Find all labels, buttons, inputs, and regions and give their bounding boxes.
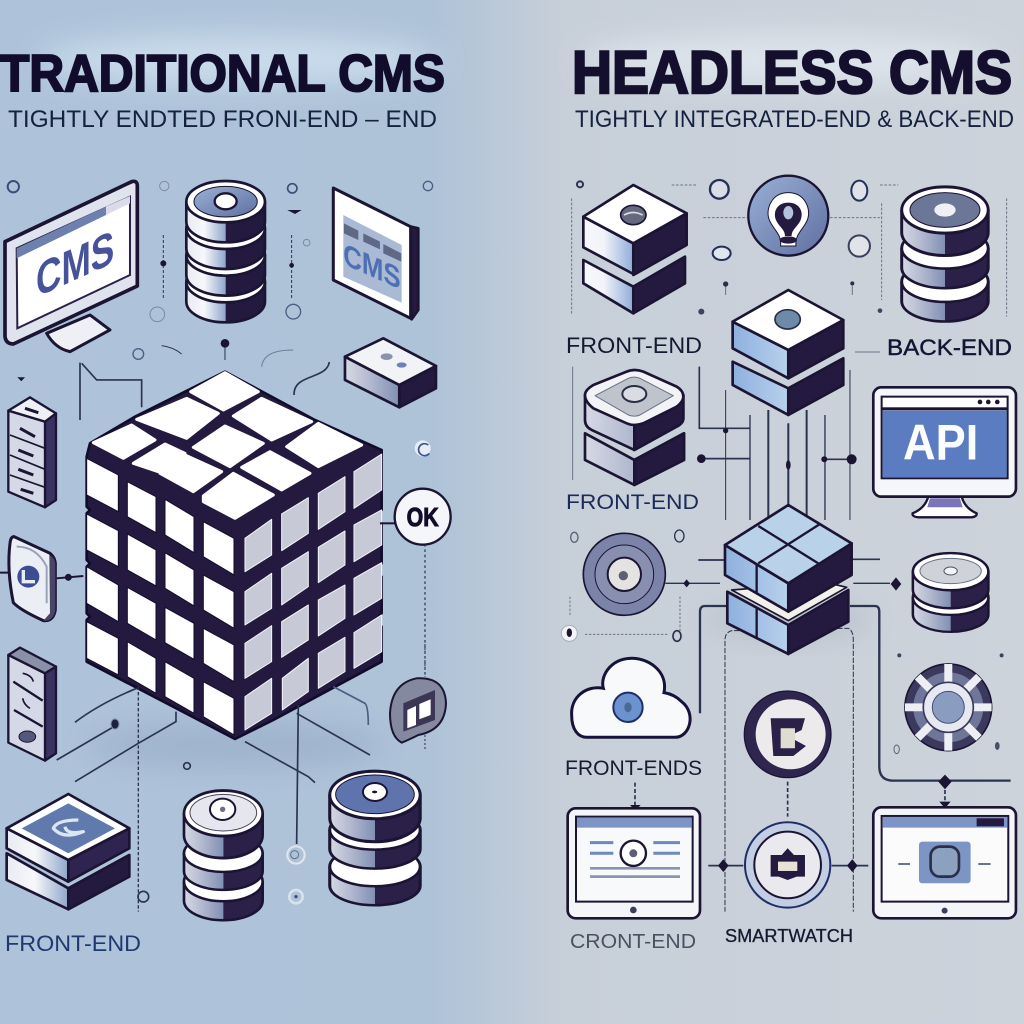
icon: refresh dot: [415, 440, 431, 456]
icon: round device: [0, 537, 83, 621]
label: API: API: [903, 414, 978, 470]
icon: circular C badge: [744, 691, 831, 778]
label: front-end bottom left: FRONT-END: [5, 931, 141, 956]
icon: stacked flat pad: [7, 794, 129, 909]
icon: filing cabinet lower: [8, 648, 56, 761]
icon: API monitor: [873, 387, 1016, 517]
icon: front-end block A: [583, 185, 687, 313]
icon: database stack top: [186, 181, 265, 322]
label: smartwatch: SMARTWATCH: [725, 926, 853, 946]
panel: headless CMS: [561, 39, 1016, 953]
icon: cloud: [572, 658, 690, 737]
label: CMS on monitor: CMS: [36, 220, 114, 308]
label: OK: OK: [407, 502, 439, 532]
icon: blue disc stack: [330, 771, 420, 905]
icon: target disc: [583, 533, 665, 615]
icon: central block: [733, 290, 843, 415]
panel: traditional CMS: [0, 45, 451, 956]
connector lines: traditional bottom: [57, 640, 425, 912]
label: back-end: BACK-END: [887, 335, 1012, 360]
label: front-ends: FRONT-ENDS: [565, 757, 702, 780]
icon: tilted CMS screen: [333, 188, 418, 319]
title: traditional: TRADITIONAL CMS: [0, 45, 445, 103]
icon: CMS monitor: [5, 181, 137, 352]
connector lines: headless lower: [561, 530, 1011, 912]
label: blurred CMS on screen: CMS: [343, 236, 401, 296]
icon: right tablet: [873, 807, 1016, 918]
icon: back-end database stack: [902, 187, 988, 322]
connector lines: headless upper: [572, 180, 1007, 520]
icon: rounded front-end module: [585, 370, 684, 485]
icon: stacked disc right: [913, 553, 988, 632]
icon: filing cabinet upper: [8, 397, 56, 507]
icon: keyhole badge: [748, 176, 828, 256]
subtitle: traditional: TIGHTLY ENDTED FRONI-END – END: [8, 106, 437, 133]
icon: API hub cube: [725, 505, 852, 654]
icon: smartwatch circle: [745, 822, 830, 908]
label: front-end 1: FRONT-END: [566, 333, 702, 358]
connector lines: traditional top: [8, 181, 433, 420]
icon: grey disc stack: [184, 791, 263, 920]
icon: badge with bars: [390, 678, 446, 743]
icon: left tablet: [568, 808, 700, 918]
chart: central modular cube: [87, 372, 382, 739]
label: cront-end: CRONT-END: [570, 931, 696, 953]
icon: OK circle: [380, 489, 451, 677]
icon: gear: [905, 664, 992, 751]
label: front-end 2: FRONT-END: [566, 491, 699, 514]
icon: flat server box: [345, 338, 436, 407]
